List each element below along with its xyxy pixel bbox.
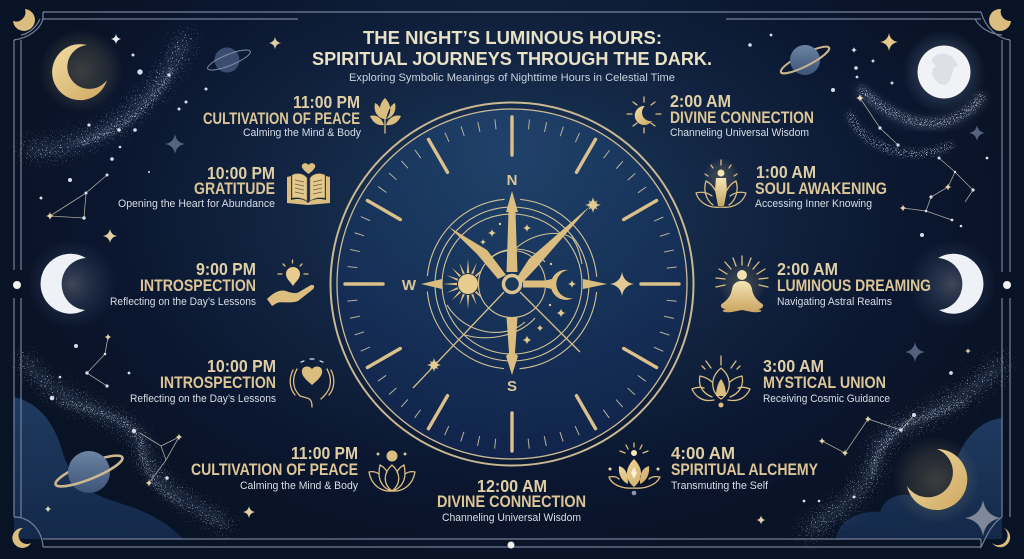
inner orbit disc	[478, 250, 546, 318]
item: 3:00 AM mystical union: Receiving Cosmic Guidance	[763, 393, 890, 405]
title	[312, 27, 712, 69]
icon: white crescent left	[27, 239, 117, 329]
item: 2:00 AM divine connection: DIVINE CONNECTION	[670, 109, 814, 127]
item: 10:00 PM introspection	[130, 356, 277, 405]
title: SPIRITUAL JOURNEYS THROUGH THE DARK.	[312, 48, 712, 69]
item: 9:00 PM introspection: 9:00 PM	[196, 259, 256, 279]
item: 2:00 AM luminous dreaming: 2:00 AM	[777, 259, 838, 279]
item: 1:00 AM soul awakening: Accessing Inner Knowing	[755, 198, 872, 210]
icon: planet top left	[206, 46, 252, 74]
item: 11:00 PM lower left: CULTIVATION OF PEACE	[191, 461, 358, 479]
icon: planet bottom left	[53, 450, 125, 493]
item: 2:00 AM divine connection	[670, 91, 814, 139]
icon: lotus with orb	[369, 450, 415, 491]
item: 11:00 PM lower left: Calming the Mind & Body	[240, 480, 359, 492]
milky way bottom left	[25, 360, 225, 525]
minor ticks	[352, 124, 672, 444]
item: 4:00 AM spiritual alchemy: Transmuting the Self	[671, 480, 769, 492]
icon: meditating figure	[716, 256, 768, 312]
frame node left	[13, 281, 21, 289]
icon: full moon	[902, 30, 986, 114]
milky way top right	[850, 88, 983, 153]
item: 1:00 AM soul awakening: 1:00 AM	[756, 162, 816, 182]
item: 11:00 PM upper left: CULTIVATION OF PEACE	[203, 110, 360, 128]
item: 12:00 AM divine connection: 12:00 AM	[477, 476, 547, 496]
icon: lotus with flame and rays	[608, 443, 660, 495]
thin needles	[413, 292, 580, 388]
icon: lotus flower	[370, 98, 401, 133]
icon: white crescent right	[907, 239, 997, 329]
item: 9:00 PM introspection: INTROSPECTION	[140, 277, 256, 295]
icon: lotus with flame	[692, 356, 750, 408]
item: 3:00 AM mystical union: 3:00 AM	[763, 356, 824, 376]
item: 2:00 AM divine connection: Channeling Universal Wisdom	[670, 127, 809, 139]
title: THE NIGHT’S LUMINOUS HOURS:	[363, 27, 662, 48]
compass letters	[402, 172, 517, 395]
compass dial	[330, 102, 694, 466]
icon: sun	[443, 250, 546, 318]
subtitle: Exploring Symbolic Meanings of Nighttime Hours in Celestial Time	[349, 72, 675, 84]
inner rings	[427, 199, 597, 369]
item: 10:00 PM gratitude: Opening the Heart for Abundance	[118, 198, 275, 210]
icon: glowing figure in lotus	[696, 158, 746, 207]
item: 2:00 AM luminous dreaming	[777, 259, 931, 308]
compass letters: S	[507, 378, 517, 395]
needles	[421, 191, 607, 375]
milky way top left	[30, 40, 185, 150]
icon: gold crescent moon top left	[39, 29, 123, 113]
item: 11:00 PM lower left: 11:00 PM	[291, 443, 358, 463]
icon: hand with light bulb	[267, 260, 314, 306]
item: 10:00 PM gratitude: GRATITUDE	[194, 180, 275, 198]
cloud bottom left	[14, 397, 183, 539]
item: 10:00 PM gratitude	[118, 163, 275, 210]
item: 2:00 AM luminous dreaming: Navigating Astral Realms	[777, 296, 893, 308]
item: 4:00 AM spiritual alchemy: 4:00 AM	[671, 443, 735, 463]
item: 3:00 AM mystical union: MYSTICAL UNION	[763, 374, 886, 392]
item: 1:00 AM soul awakening	[755, 162, 887, 210]
item: 11:00 PM upper left: Calming the Mind & Body	[243, 127, 362, 139]
item: 4:00 AM spiritual alchemy	[671, 443, 818, 492]
item: 4:00 AM spiritual alchemy: SPIRITUAL ALCHEMY	[671, 461, 818, 479]
compass letters: N	[507, 172, 517, 189]
item: 2:00 AM divine connection: 2:00 AM	[670, 91, 731, 111]
item: 10:00 PM introspection: INTROSPECTION	[160, 374, 276, 392]
frame node right	[1003, 281, 1011, 289]
icon: open book with heart	[287, 163, 330, 205]
item: 1:00 AM soul awakening: SOUL AWAKENING	[755, 180, 887, 198]
item: 12:00 AM divine connection: Channeling Universal Wisdom	[442, 512, 581, 524]
milky way bottom right	[810, 365, 1000, 530]
icon: heart in hands	[290, 359, 334, 407]
icon: sun and crescent	[627, 97, 661, 133]
item: 9:00 PM introspection: Reflecting on the Day’s Lessons	[110, 296, 257, 308]
cloud bottom right	[836, 418, 1002, 539]
dial stars	[426, 196, 634, 373]
centre hub	[504, 276, 520, 292]
frame node bottom	[508, 542, 514, 548]
item: 11:00 PM upper left: 11:00 PM	[293, 92, 360, 112]
item: 10:00 PM introspection: 10:00 PM	[207, 356, 276, 376]
item: 12:00 AM divine connection: DIVINE CONNECTION	[437, 493, 586, 511]
item: 10:00 PM introspection: Reflecting on the Day’s Lessons	[130, 393, 277, 405]
constellations	[50, 98, 973, 483]
item: 3:00 AM mystical union	[763, 356, 890, 405]
item: 11:00 PM upper left	[203, 92, 362, 139]
icon: gold crescent bottom right	[892, 436, 980, 524]
item: 10:00 PM gratitude: 10:00 PM	[207, 163, 275, 183]
item: 9:00 PM introspection	[110, 259, 257, 308]
major ticks	[345, 117, 679, 451]
item: 12:00 AM divine connection	[437, 476, 586, 524]
icon: planet top right	[778, 42, 832, 78]
item: 2:00 AM luminous dreaming: LUMINOUS DREAMING	[777, 277, 931, 295]
item: 11:00 PM lower left	[191, 443, 359, 492]
compass letters: W	[402, 277, 417, 294]
background stars	[40, 34, 988, 502]
